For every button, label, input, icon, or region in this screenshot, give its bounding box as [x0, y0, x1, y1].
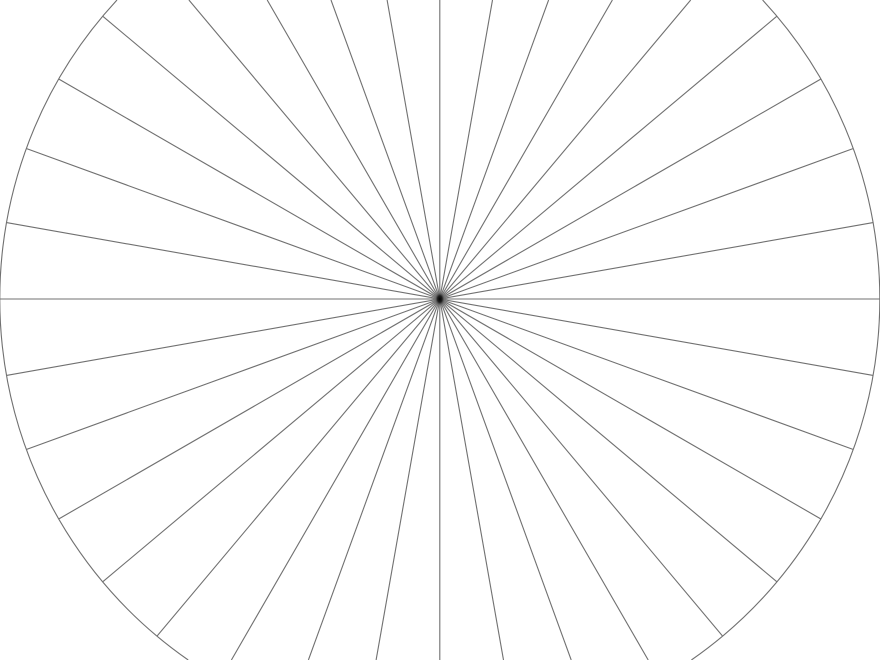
centre hub where spokes converge — [432, 288, 448, 310]
